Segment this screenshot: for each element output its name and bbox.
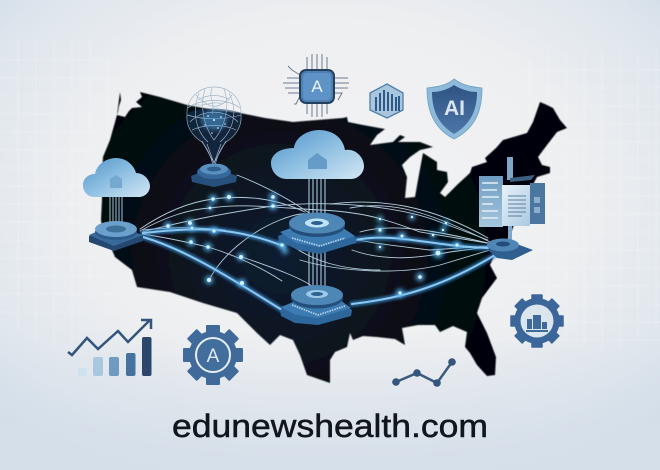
icon: growth chart [68,320,152,376]
icon: bar gear [500,284,574,358]
icon: AI chip [283,54,349,117]
chip body [300,70,334,103]
brain platform [191,164,237,187]
thin connection lines [140,175,490,286]
thick blue glowing routes [143,229,495,310]
lower chip [280,285,352,325]
dark lower brain core [188,108,241,165]
brain sparkle [201,110,227,134]
centre document [502,185,530,226]
icon: A gear: A [207,346,220,367]
crossbar [510,175,535,182]
central cloud and chip stack [271,130,364,325]
icon: line chart [392,358,456,387]
left panel [479,176,503,227]
right hub platform [487,238,533,260]
wireframe brain [187,87,241,165]
map of the United States [101,92,567,383]
bars [78,337,152,376]
icon: hexagon bars [370,84,403,118]
platform [89,221,143,251]
cloud posts [110,197,122,224]
home icon [110,175,122,188]
icon: AI shield [427,79,482,139]
upper posts [309,179,325,222]
icon: A gear [172,314,254,396]
big cloud [271,130,364,179]
glowing nodes [164,193,461,297]
trend arrow [68,320,151,355]
chip traces [283,54,349,117]
cloud [83,158,150,197]
chip letter: A [311,77,323,96]
brain node [187,87,241,187]
upper chip [278,212,357,254]
home icon [308,153,327,169]
icon: AI shield: AI [444,97,465,120]
network lines [140,175,495,310]
lower posts [309,250,325,288]
pole [507,157,513,242]
document server node [479,157,545,260]
left cloud node [83,158,150,251]
right panel [530,183,545,224]
website name: edunewshealth.com [172,408,488,444]
